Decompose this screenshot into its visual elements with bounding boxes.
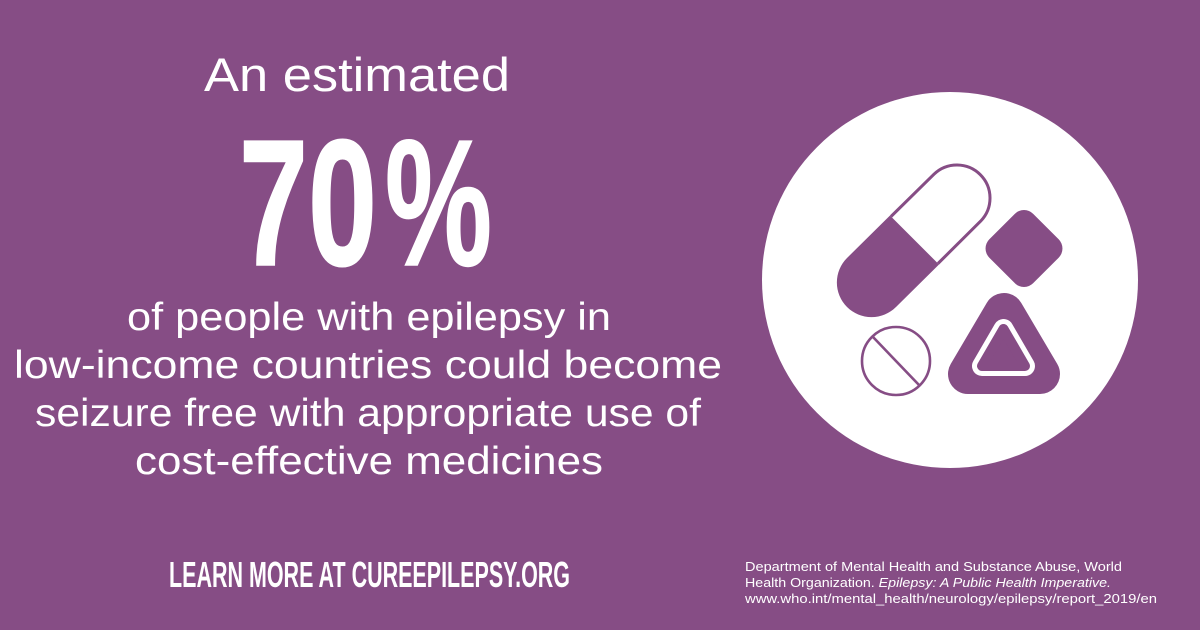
big number: 70%: 70	[239, 103, 377, 304]
text block: description: low-income countries could become	[14, 344, 722, 387]
source citation: Department of Mental Health and Substance Abuse, World	[745, 559, 1122, 574]
icon: rounded diamond tablet	[980, 205, 1068, 292]
text block: description: cost-effective medicines	[135, 440, 603, 483]
text block: description: of people with epilepsy in	[127, 296, 611, 339]
icon: capsule	[837, 165, 990, 317]
source citation: Health Organization. Epilepsy: A Public Health Imperative.	[745, 575, 1111, 590]
source citation	[744, 559, 1157, 606]
text block: description	[14, 296, 722, 483]
text block: description: seizure free with appropriate use of	[35, 392, 701, 435]
icon: triangular tablet	[968, 313, 1040, 374]
icon: scored round tablet	[862, 327, 930, 395]
big number: 70%: %	[385, 103, 492, 304]
heading: An estimated: An estimated	[204, 48, 510, 101]
icon: medicines in white circle	[762, 92, 1138, 468]
source citation: www.who.int/mental_health/neurology/epilepsy/report_2019/en	[744, 591, 1157, 606]
call to action: LEARN MORE AT CUREEPILEPSY.ORG	[169, 554, 570, 595]
